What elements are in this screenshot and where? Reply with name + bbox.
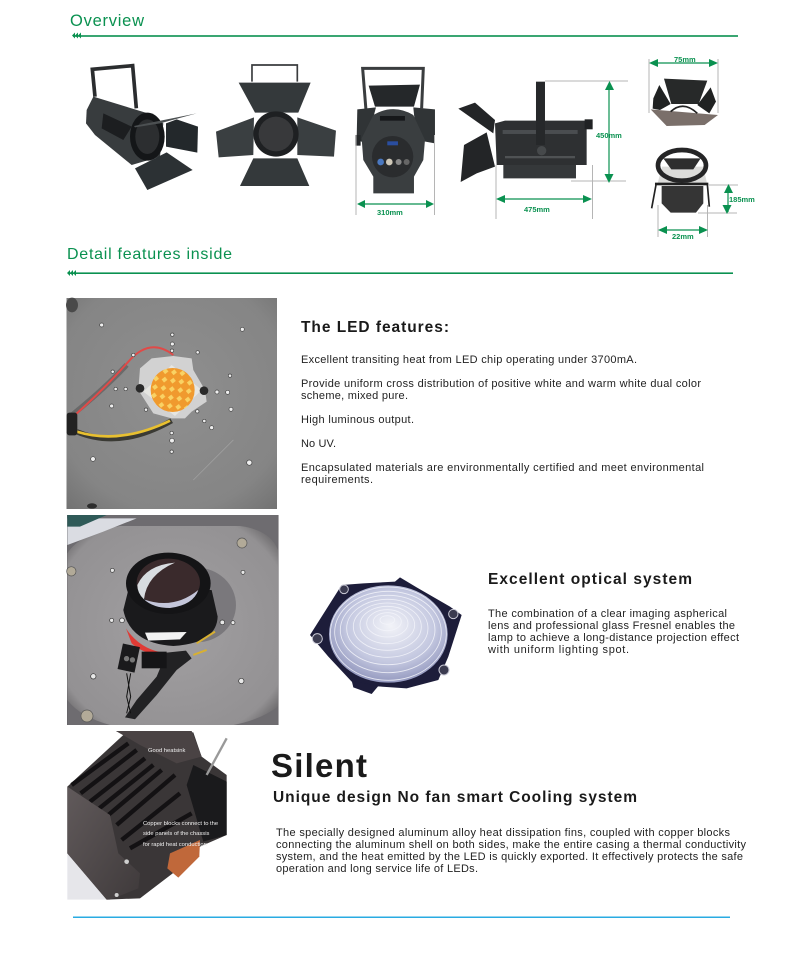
heading: Detail features inside	[67, 246, 733, 276]
text: The LED features: Encapsulated materials are environmentally certified and meet environmental	[301, 462, 704, 474]
dimensions: 75mm, 185mm and 22mm: 185mm	[729, 195, 755, 204]
text: Excellent optical system: lens and professional glass Fresnel enables the	[488, 620, 735, 632]
footer rule	[73, 916, 730, 918]
heading: Overview	[70, 12, 738, 38]
heading: Silent: Silent	[271, 747, 367, 784]
text: Excellent optical system: with uniform lighting spot.	[487, 644, 629, 656]
text: The LED features: scheme, mixed pure.	[301, 390, 408, 402]
heading rule: Detail features inside	[67, 270, 733, 276]
text: The LED features: requirements.	[301, 474, 373, 486]
text: Cooling system	[273, 789, 746, 875]
dimension: 310mm	[356, 135, 434, 217]
heading: Overview: Overview	[70, 12, 144, 30]
photo caption: copper blocks: side panels of the chassis	[143, 831, 209, 837]
product photo: front view	[216, 65, 336, 186]
product photo: barn door, top	[651, 79, 718, 126]
dimensions: 75mm, 185mm and 22mm: 22mm	[672, 232, 694, 241]
dimensions: 450mm and 475mm: 475mm	[524, 205, 550, 214]
text: The LED features: Provide uniform cross distribution of positive white and warm white dual color	[301, 378, 701, 390]
text: Cooling system: operation and long service life of LEDs.	[276, 863, 478, 875]
product photo: angled view	[86, 66, 198, 190]
text: Excellent optical system: The combination of a clear imaging aspherical	[488, 608, 727, 620]
text: The LED features: The LED features:	[301, 319, 449, 336]
text: The LED features: High luminous output.	[301, 414, 414, 426]
photo: Fresnel glass lens	[310, 577, 462, 694]
photo: aluminum heatsink with copper block	[67, 731, 227, 900]
product photo: side view with dimensions	[458, 82, 593, 182]
photo caption: Good heatsink: Good heatsink	[148, 748, 185, 754]
dimension: 310mm: 310mm	[377, 208, 403, 217]
dimensions: 450mm and 475mm: 450mm	[596, 131, 622, 140]
product photo: barn door, bottom	[652, 150, 709, 213]
photo: aspherical lens module	[67, 515, 278, 725]
text: Cooling system: system, and the heat emitted by the LED is quickly exported. It effectively protects the safe	[276, 851, 743, 863]
text: Cooling system: Unique design No fan smart Cooling system	[273, 789, 637, 806]
photo caption: copper blocks: Copper blocks connect to the	[143, 821, 218, 827]
text: Excellent optical system: lamp to achieve a long-distance projection effect	[488, 632, 739, 644]
text: The LED features: No UV.	[301, 438, 336, 450]
product photo: rear view with 310mm dimension	[355, 68, 435, 193]
heading rule: Overview	[72, 32, 738, 38]
text: The LED features: Excellent transiting heat from LED chip operating under 3700mA.	[301, 354, 637, 366]
dimensions: 75mm, 185mm and 22mm	[649, 55, 755, 241]
photo: LED chip on heat plate	[66, 298, 277, 509]
text: Cooling system: connecting the aluminum shell on both sides, make the entire casing a thermal conductivity	[276, 839, 746, 851]
dimensions: 75mm, 185mm and 22mm: 75mm	[674, 55, 696, 64]
dimensions: 450mm and 475mm	[496, 81, 628, 219]
heading: Detail features inside: Detail features inside	[67, 246, 232, 263]
photo caption: copper blocks	[143, 821, 218, 848]
text: Excellent optical system: Excellent optical system	[488, 571, 692, 588]
text: The LED features	[301, 319, 704, 486]
photo caption: copper blocks: for rapid heat conduction	[143, 842, 207, 848]
text: Cooling system: The specially designed aluminum alloy heat dissipation fins, coupled with copper blocks	[276, 827, 730, 839]
text: Excellent optical system	[487, 571, 739, 656]
